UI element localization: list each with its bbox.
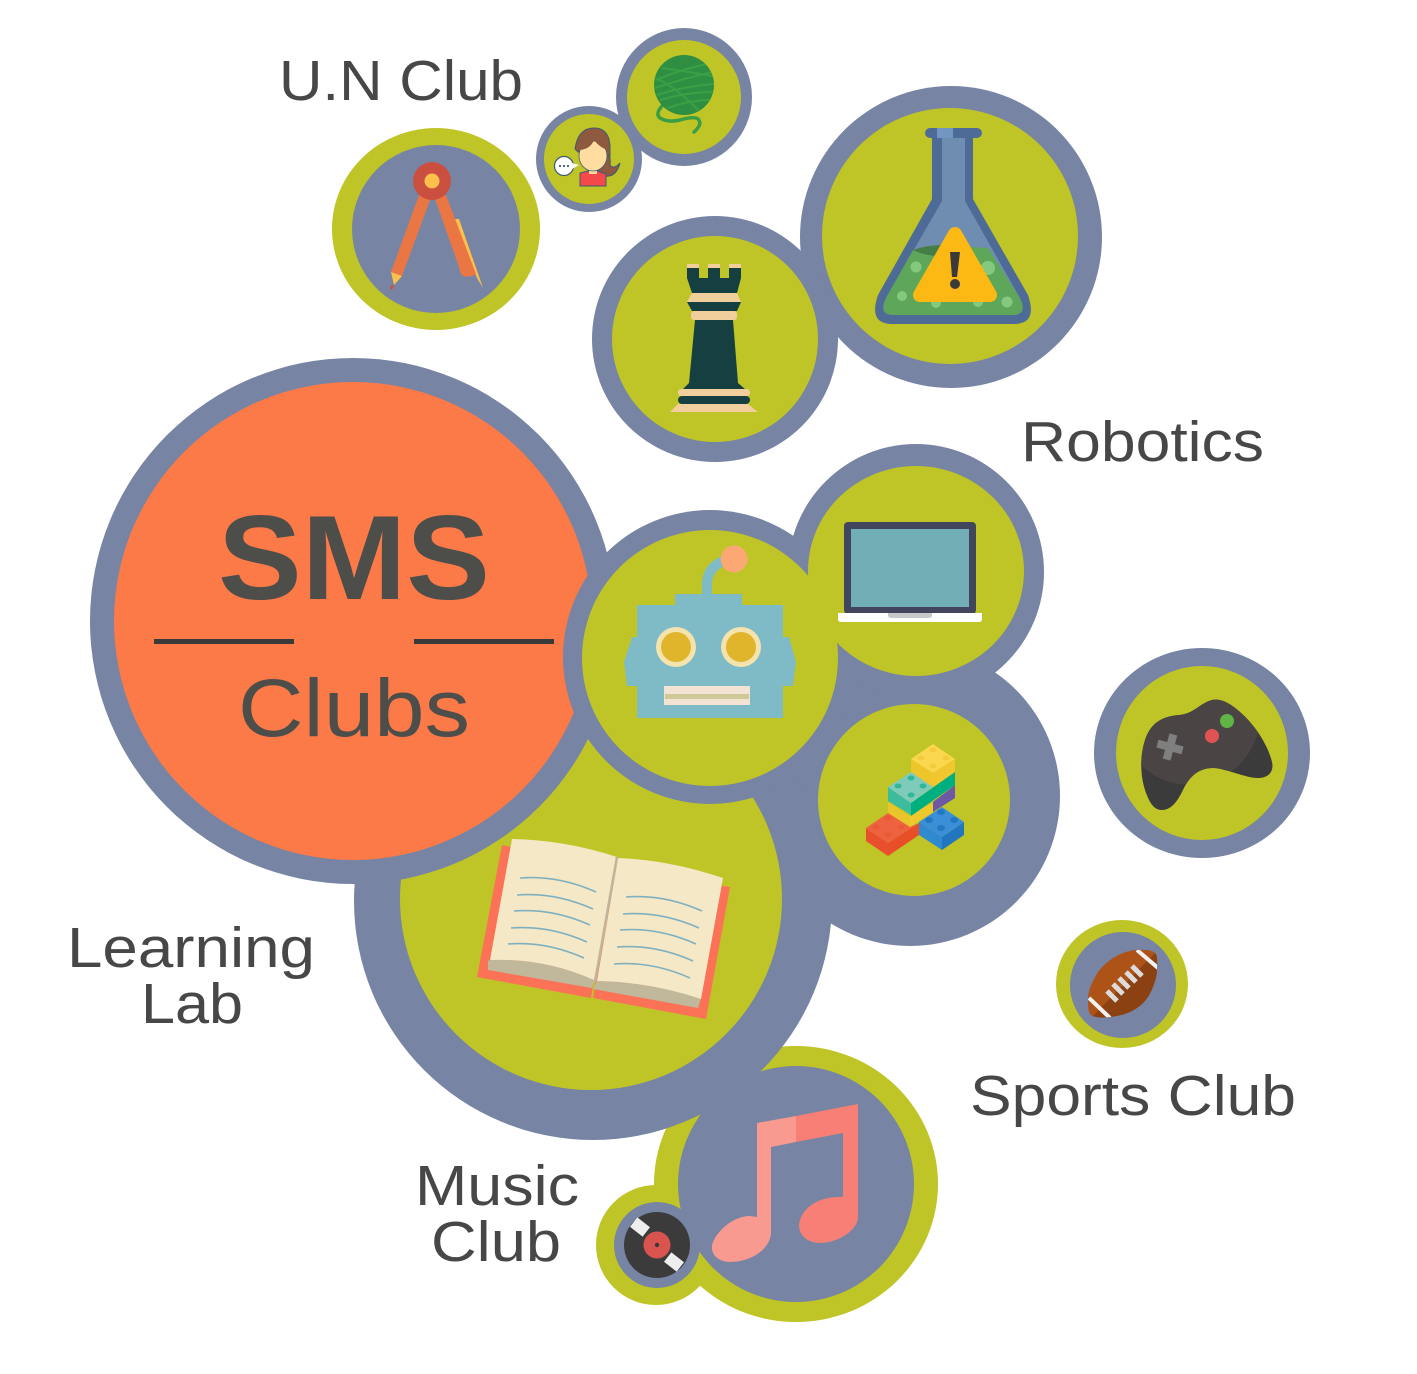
bubble: gamepad ring: [1094, 648, 1310, 858]
bubble: compass ring: [332, 128, 540, 330]
label: Learning Lab: Lab: [141, 972, 243, 1036]
label: Music Club: Music: [415, 1154, 579, 1218]
brick: purple: [933, 785, 955, 812]
bubble: robot ring: [563, 510, 857, 804]
icon: yarn ball: [654, 55, 714, 132]
heading: SMS: SMS: [218, 491, 490, 625]
icon: open book: [477, 839, 730, 1019]
brick: blue: [919, 807, 964, 850]
divider right: [414, 639, 554, 644]
bubble: gamepad inner: [1116, 666, 1288, 840]
label: U.N Club: U.N Club: [279, 49, 523, 113]
bubble: person ring: [536, 106, 642, 212]
icon: lego bricks: [866, 744, 964, 856]
brick: top yellow: [911, 744, 955, 787]
bubble: football ring: [1056, 920, 1188, 1048]
bubble: flask ring: [800, 86, 1102, 388]
brick: lower yellow: [888, 802, 933, 827]
bubble: football inner: [1070, 932, 1176, 1038]
icon: drawing compass: [390, 162, 483, 290]
bubble: learning lab inner: [400, 708, 782, 1090]
label: Music Club: [415, 1154, 579, 1274]
bubble: laptop inner: [808, 466, 1024, 676]
icon: laptop: [838, 522, 982, 622]
label: Robotics: Robotics: [1021, 410, 1264, 474]
bubble: SMS orange inner: [114, 382, 592, 860]
label: Sports Club: Sports Club: [970, 1064, 1296, 1128]
bubble: SMS ring: [90, 358, 616, 884]
title: SMS Clubs: [154, 491, 554, 754]
bubble: vinyl outer ring: [596, 1185, 716, 1305]
divider left: [154, 639, 294, 644]
bubble: person inner: [544, 114, 634, 204]
bubble: chess ring: [592, 216, 838, 462]
brick: red: [866, 813, 919, 856]
icon: chess rook: [670, 264, 758, 412]
bubble: chess inner: [612, 236, 818, 442]
bubble: learning lab ring: [354, 662, 832, 1140]
brick: teal: [888, 772, 955, 816]
icon: person with speech bubble: [554, 128, 620, 186]
icon: chemistry flask: [875, 128, 1031, 324]
icon: music notes: [712, 1104, 858, 1262]
bubble: laptop ring: [788, 444, 1044, 700]
icon: game controller: [1141, 700, 1272, 810]
subheading: Clubs: Clubs: [238, 663, 470, 754]
bubble: lego inner: [818, 704, 1010, 896]
label: Music Club: Club: [431, 1210, 561, 1274]
bubble: yarn inner: [627, 40, 741, 154]
bubble: compass inner: [352, 145, 520, 313]
bubble: lego ring: [760, 646, 1060, 946]
bubble: music outer ring: [654, 1046, 938, 1322]
bubble: yarn ring: [616, 28, 752, 166]
icon: robot head: [624, 546, 796, 718]
bubble: music inner: [678, 1066, 914, 1302]
bubble: vinyl inner: [614, 1202, 700, 1288]
label: Learning Lab: Learning: [67, 916, 315, 980]
icon: american football: [1088, 950, 1158, 1018]
bubble: robot inner: [582, 530, 838, 786]
bubble: flask inner: [822, 108, 1078, 364]
label: Learning Lab: [67, 916, 315, 1036]
icon: vinyl record: [624, 1212, 690, 1278]
